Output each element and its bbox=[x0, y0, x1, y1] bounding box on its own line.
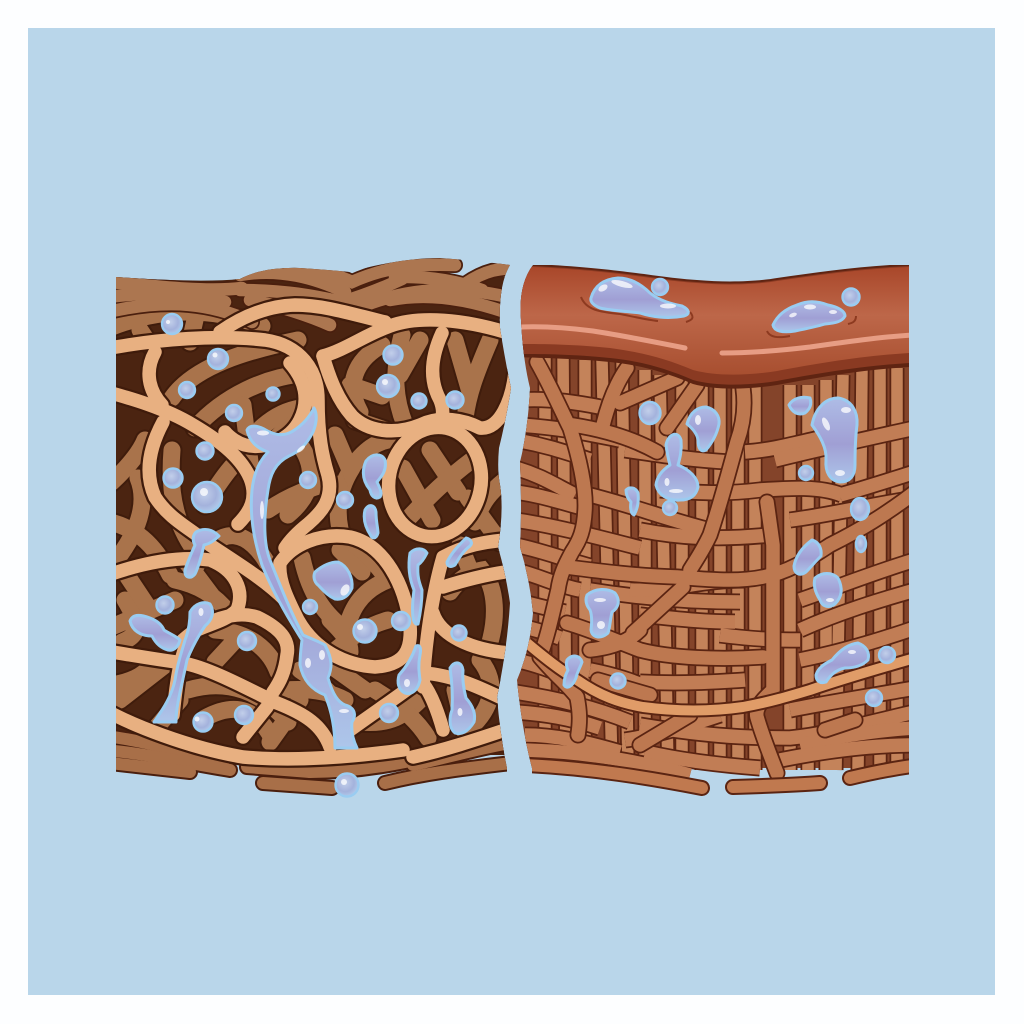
icon: small round droplets bbox=[610, 402, 895, 706]
sealed surface coating bbox=[515, 264, 912, 389]
icon: surface puddles bbox=[591, 278, 860, 332]
back fibres tangle bbox=[100, 312, 505, 742]
bottom loose fibres bbox=[100, 735, 520, 788]
icon: main water streak bbox=[247, 408, 357, 748]
bottom fibres bbox=[525, 765, 920, 788]
horizontal woven fibres bbox=[515, 399, 915, 775]
panel: porous loose fibre structure bbox=[100, 265, 520, 796]
pale crossing fibre bbox=[527, 643, 915, 710]
pale front fibre loops bbox=[100, 305, 515, 759]
icon: round bubbles bbox=[156, 314, 466, 796]
dark cavity backing bbox=[116, 277, 512, 755]
panel: sealed dense fibre structure bbox=[515, 264, 920, 788]
water droplets in porous structure bbox=[130, 314, 475, 796]
water beading on coating and fibres bbox=[564, 278, 895, 706]
dense backing bbox=[515, 340, 909, 768]
long crossing fibres bbox=[537, 362, 915, 773]
icon: left drips bbox=[130, 455, 475, 734]
icon: left highlights bbox=[166, 320, 462, 785]
vertical short fibres bbox=[545, 355, 897, 770]
top fibre band bbox=[100, 265, 520, 325]
icon: large drops among fibres bbox=[564, 397, 869, 687]
